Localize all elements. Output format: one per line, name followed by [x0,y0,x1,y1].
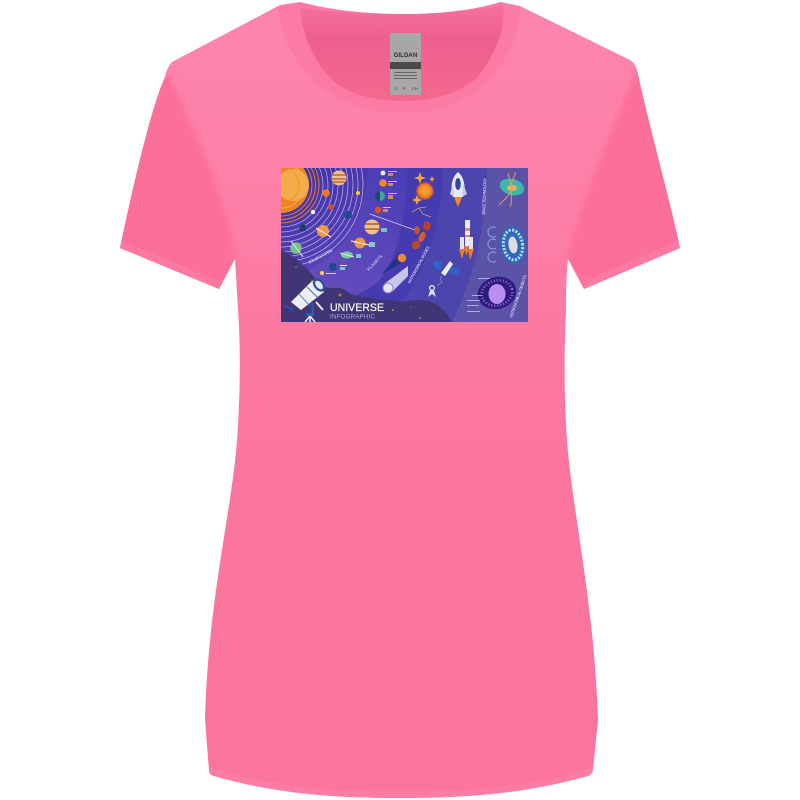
dark hill [281,250,452,322]
neck label: S [395,86,398,91]
label: astronomical bodies: ASTRONOMICAL BODIES [406,245,431,284]
dark comet [381,254,406,275]
left sleeve hem [120,241,221,289]
band: technology [402,168,487,322]
front collar [278,2,520,64]
bottom hem [209,767,593,798]
sun [281,168,320,224]
title: UNIVERSE [330,302,384,314]
neck label: CH [412,86,418,91]
solar system planets [290,170,360,257]
satellite [433,260,460,276]
asteroid pointer line [370,214,415,230]
rocket two [459,220,474,260]
band: astronomical bodies [356,168,443,302]
label: solar system: SOLAR SYSTEM [307,248,333,265]
band: planets [308,168,406,296]
telescope [285,276,328,322]
white comet [383,266,408,293]
panel background [452,168,528,322]
universe infographic print [281,168,528,322]
wormhole [498,172,526,207]
hill sparkles [295,266,421,319]
rocket one [450,172,467,207]
stars and asteroids [412,172,435,249]
neck label [390,33,421,95]
neck label: GILDAN [394,52,418,59]
neck label: P [403,86,406,91]
orbit rings [281,168,364,264]
label: astronomical objects: ASTRONOMICAL OBJECTS [508,274,528,318]
spiral galaxy [500,226,526,264]
title [330,302,384,320]
title: INFOGRAPHIC [330,314,376,320]
left sleeve [120,74,236,289]
nebula labels [467,278,490,312]
band: solar system [281,168,368,278]
right sleeve hem [582,241,680,289]
planet data labels [326,171,397,274]
label: planets: PLANETS [366,253,384,272]
t-shirt [100,0,700,800]
right sleeve [568,70,680,289]
astronaut [428,276,442,297]
label: space technology: SPACE TECHNOLOGY [481,178,487,215]
shirt body and sleeves [100,0,700,800]
gauge arcs [488,227,496,262]
purple nebula [478,276,516,310]
inner back neck [300,5,503,101]
planets column [320,171,387,275]
